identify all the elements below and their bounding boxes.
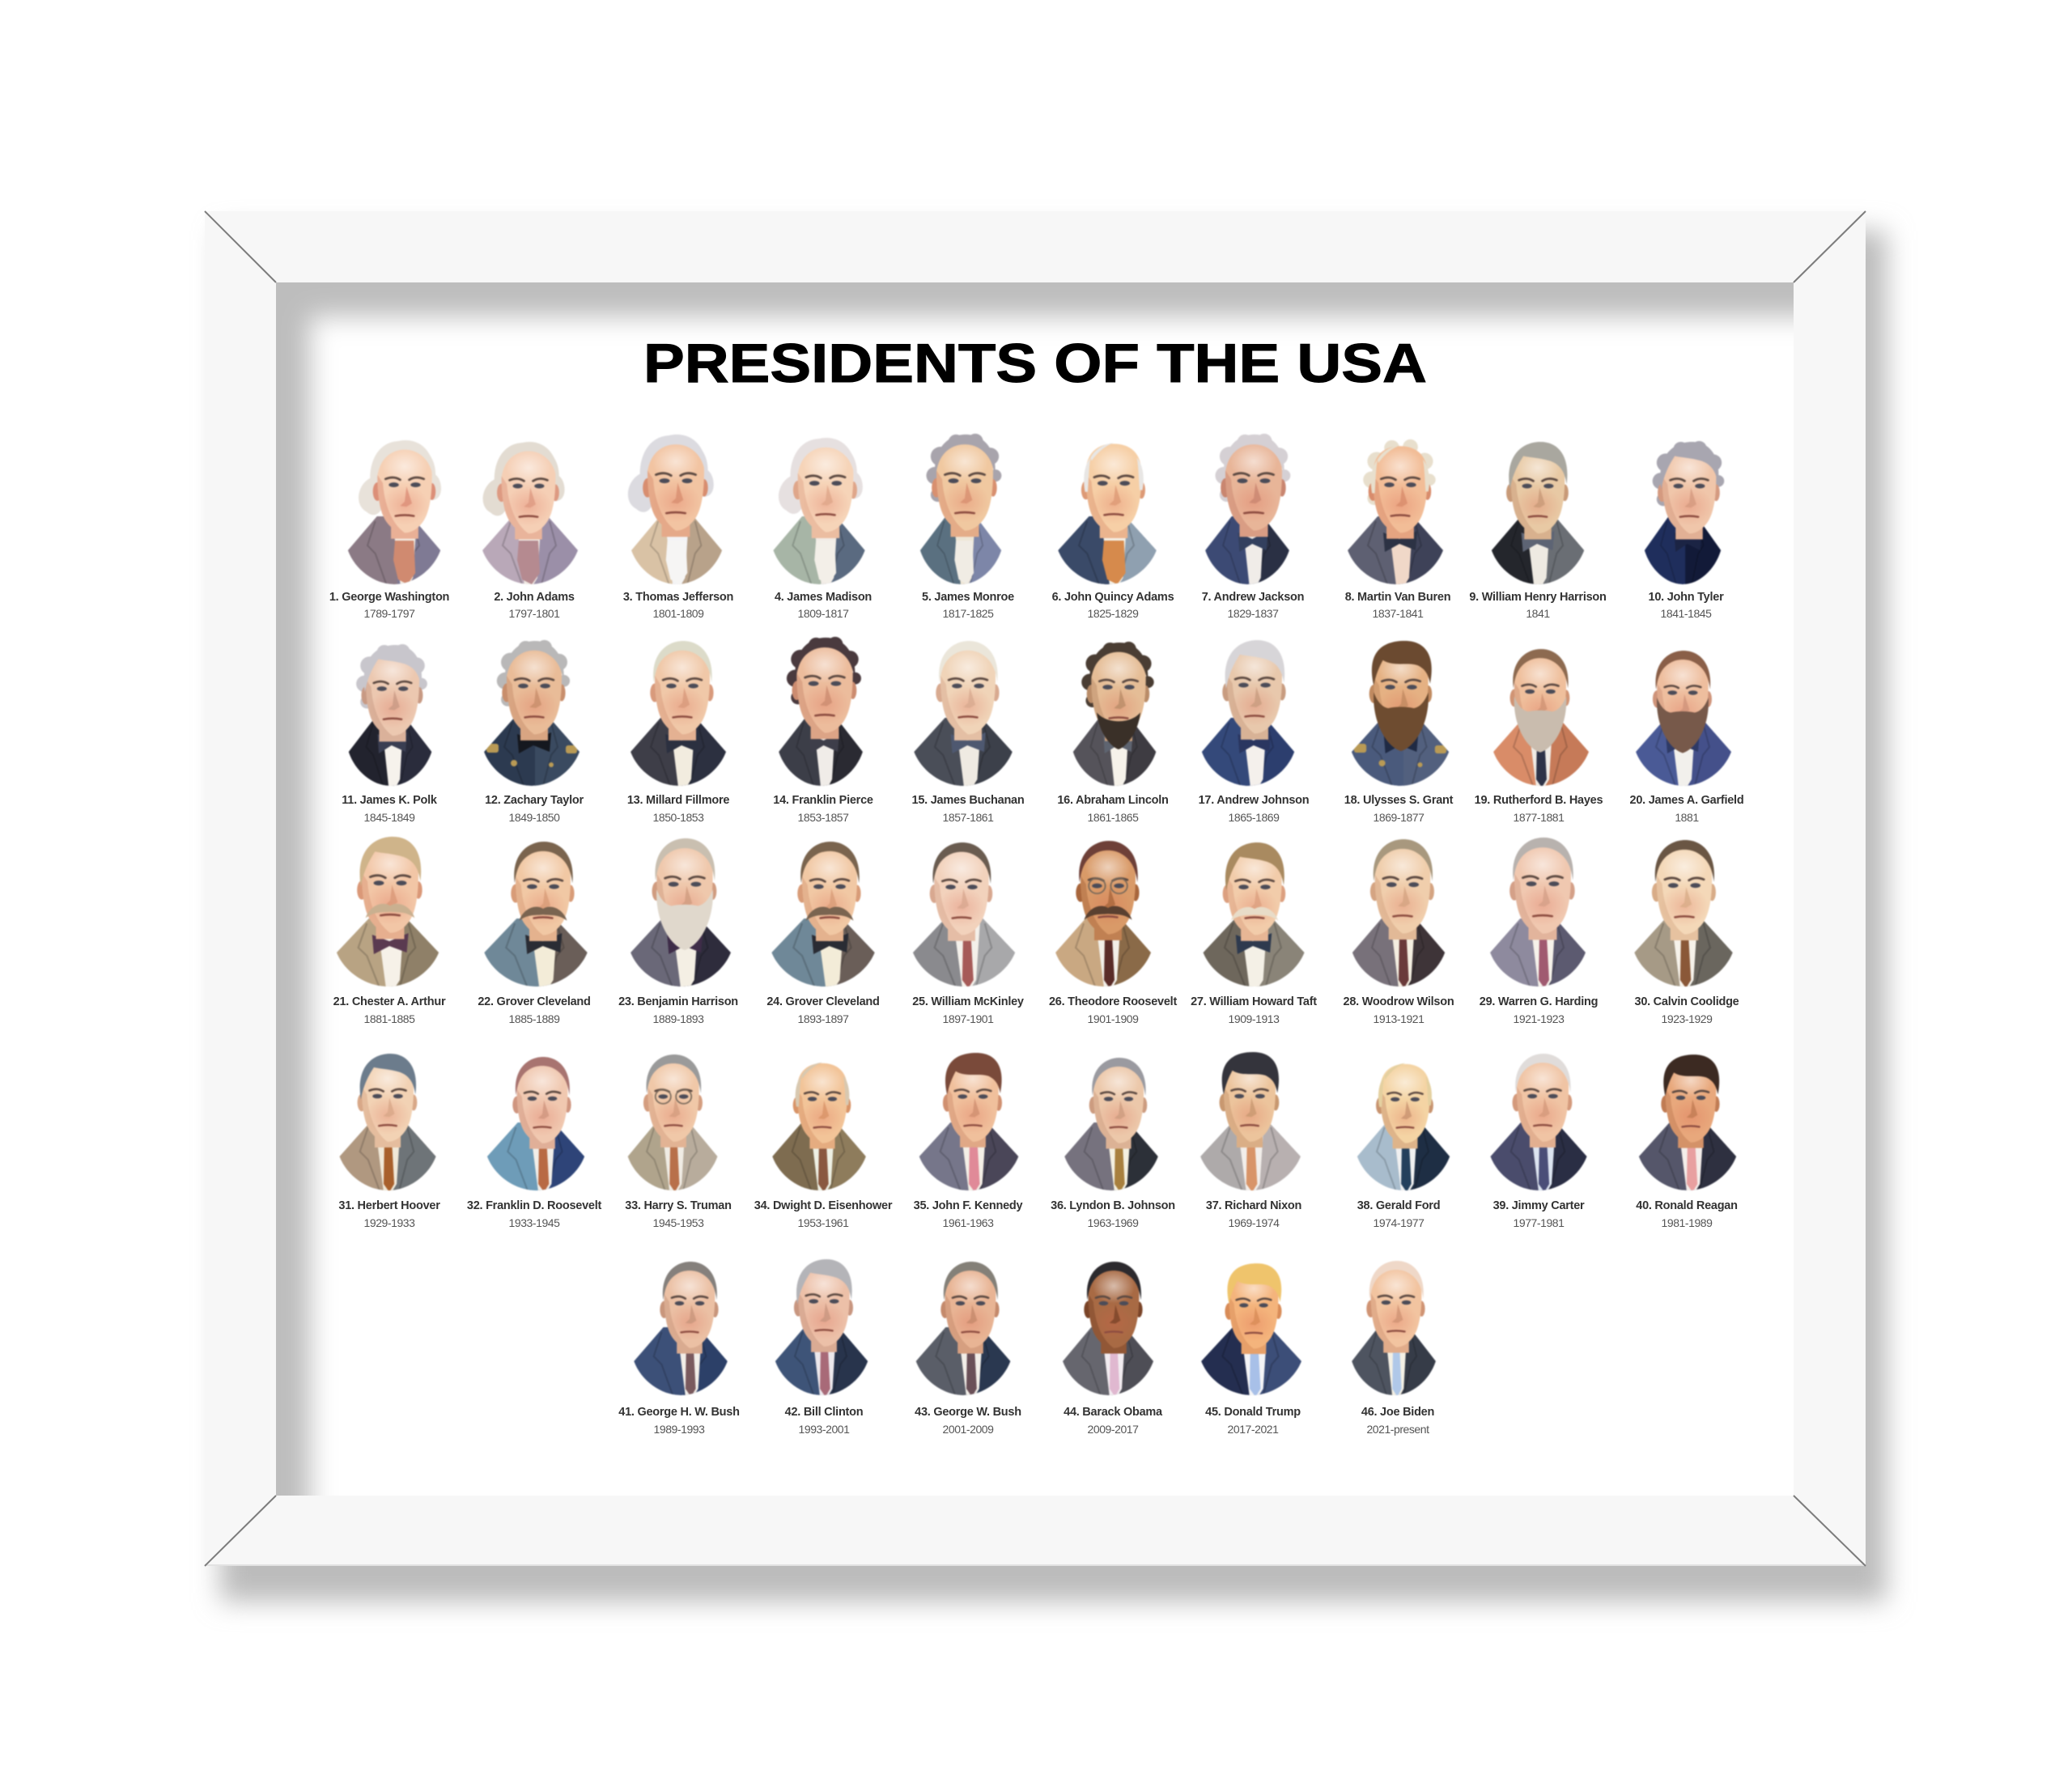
name: 24. Grover Cleveland	[766, 995, 880, 1008]
title: PRESIDENTS OF THE USA	[643, 333, 1427, 394]
name: 14. Franklin Pierce	[773, 794, 873, 807]
term: 1893-1897	[798, 1012, 849, 1025]
name: 34. Dwight D. Eisenhower	[754, 1199, 893, 1212]
portrait: Gerald Ford	[1357, 1063, 1450, 1192]
president 28	[1344, 839, 1454, 1025]
term: 1877-1881	[1514, 811, 1565, 824]
president 6	[1052, 443, 1174, 620]
portrait: John F. Kennedy	[919, 1053, 1018, 1192]
term: 1977-1981	[1514, 1216, 1565, 1229]
portrait: George H. W. Bush	[634, 1262, 728, 1397]
president 42	[775, 1259, 868, 1436]
name: 4. James Madison	[775, 591, 872, 604]
term: 2009-2017	[1088, 1423, 1139, 1436]
president 38	[1357, 1063, 1450, 1229]
portrait: Andrew Johnson	[1202, 640, 1294, 787]
name: 9. William Henry Harrison	[1469, 591, 1607, 604]
president 24	[766, 842, 880, 1025]
portrait: James Monroe	[920, 434, 1001, 586]
term: 1845-1849	[364, 811, 415, 824]
term: 1923-1929	[1662, 1012, 1713, 1025]
term: 1921-1923	[1514, 1012, 1565, 1025]
portrait: John Tyler	[1645, 441, 1724, 584]
name: 40. Ronald Reagan	[1636, 1199, 1738, 1212]
portrait: Chester A. Arthur	[337, 837, 439, 988]
portrait: Martin Van Buren	[1348, 439, 1443, 586]
name: 16. Abraham Lincoln	[1057, 794, 1169, 807]
term: 1974-1977	[1374, 1216, 1424, 1229]
name: 32. Franklin D. Roosevelt	[467, 1199, 602, 1212]
name: 42. Bill Clinton	[785, 1406, 863, 1419]
term: 2001-2009	[943, 1423, 994, 1436]
president 26	[1049, 841, 1177, 1025]
president 4	[773, 438, 872, 620]
name: 46. Joe Biden	[1361, 1406, 1434, 1419]
term: 2021-present	[1366, 1423, 1429, 1436]
term: 1869-1877	[1374, 811, 1424, 824]
president 34	[754, 1063, 893, 1229]
portrait: Dwight D. Eisenhower	[772, 1063, 866, 1192]
frame drop shadow	[220, 231, 1887, 1602]
president 13	[627, 641, 729, 824]
portrait: George W. Bush	[916, 1262, 1010, 1397]
portrait: John Adams	[482, 442, 578, 586]
portrait: Millard Fillmore	[631, 641, 726, 787]
portrait: James A. Garfield	[1636, 651, 1731, 787]
portrait: Benjamin Harrison	[631, 838, 731, 988]
name: 18. Ulysses S. Grant	[1344, 794, 1454, 807]
name: 20. James A. Garfield	[1630, 794, 1743, 807]
name: 19. Rutherford B. Hayes	[1475, 794, 1603, 807]
president 27	[1191, 842, 1317, 1025]
term: 1885-1889	[509, 1012, 560, 1025]
name: 3. Thomas Jefferson	[623, 591, 733, 604]
president 35	[914, 1053, 1023, 1229]
president 11	[342, 644, 438, 824]
term: 1961-1963	[943, 1216, 994, 1229]
term: 1929-1933	[364, 1216, 415, 1229]
president 14	[773, 637, 873, 824]
portrait: Franklin D. Roosevelt	[487, 1057, 584, 1192]
name: 8. Martin Van Buren	[1345, 591, 1450, 604]
name: 39. Jimmy Carter	[1493, 1199, 1585, 1212]
term: 1909-1913	[1229, 1012, 1280, 1025]
name: 26. Theodore Roosevelt	[1049, 995, 1177, 1008]
portrait: Calvin Coolidge	[1634, 840, 1733, 988]
name: 38. Gerald Ford	[1357, 1199, 1440, 1212]
president 45	[1201, 1263, 1301, 1436]
term: 1829-1837	[1228, 607, 1279, 620]
name: 30. Calvin Coolidge	[1635, 995, 1739, 1008]
term: 2017-2021	[1228, 1423, 1279, 1436]
name: 2. John Adams	[494, 591, 575, 604]
term: 1861-1865	[1088, 811, 1139, 824]
portrait: Richard Nixon	[1200, 1052, 1301, 1192]
portrait: John Quincy Adams	[1058, 443, 1157, 586]
term: 1993-2001	[799, 1423, 850, 1436]
portrait: James Buchanan	[914, 641, 1013, 787]
portrait: Ulysses S. Grant	[1352, 641, 1449, 786]
term: 1945-1953	[653, 1216, 704, 1229]
president 21	[333, 837, 446, 1025]
name: 28. Woodrow Wilson	[1344, 995, 1454, 1008]
term: 1889-1893	[653, 1012, 704, 1025]
president 39	[1490, 1054, 1587, 1229]
name: 5. James Monroe	[922, 591, 1014, 604]
president 10	[1645, 441, 1724, 620]
name: 31. Herbert Hoover	[338, 1199, 440, 1212]
name: 25. William McKinley	[912, 995, 1024, 1008]
president 15	[912, 641, 1024, 824]
picture frame	[205, 211, 1888, 1595]
president 22	[478, 842, 591, 1025]
name: 45. Donald Trump	[1205, 1406, 1301, 1419]
term: 1849-1850	[509, 811, 560, 824]
president 36	[1051, 1058, 1175, 1229]
name: 7. Andrew Jackson	[1202, 591, 1304, 604]
president 40	[1636, 1054, 1738, 1229]
portrait: Thomas Jefferson	[628, 435, 722, 586]
name: 41. George H. W. Bush	[618, 1406, 740, 1419]
president 2	[482, 442, 578, 620]
portrait: Warren G. Harding	[1490, 838, 1586, 988]
president 18	[1344, 641, 1454, 824]
portrait: Donald Trump	[1201, 1263, 1301, 1397]
name: 27. William Howard Taft	[1191, 995, 1317, 1008]
term: 1853-1857	[798, 811, 849, 824]
term: 1969-1974	[1229, 1216, 1280, 1229]
term: 1865-1869	[1229, 811, 1280, 824]
portrait: Bill Clinton	[775, 1259, 868, 1397]
name: 22. Grover Cleveland	[478, 995, 591, 1008]
president 1	[329, 440, 449, 620]
president 12	[484, 640, 584, 824]
term: 1857-1861	[943, 811, 994, 824]
president 23	[618, 838, 738, 1025]
portrait: James K. Polk	[349, 644, 431, 787]
portrait: Rutherford B. Hayes	[1493, 649, 1589, 787]
president 19	[1475, 649, 1603, 824]
term: 1797-1801	[509, 607, 560, 620]
portrait: William Henry Harrison	[1492, 442, 1584, 586]
term: 1837-1841	[1373, 607, 1424, 620]
president 7	[1202, 434, 1304, 620]
term: 1901-1909	[1088, 1012, 1139, 1025]
president 32	[467, 1057, 602, 1229]
portrait: George Washington	[348, 440, 441, 586]
term: 1825-1829	[1088, 607, 1139, 620]
term: 1881-1885	[364, 1012, 415, 1025]
term: 1841	[1526, 607, 1550, 620]
term: 1809-1817	[798, 607, 849, 620]
president 9	[1469, 442, 1607, 620]
term: 1933-1945	[509, 1216, 560, 1229]
term: 1913-1921	[1374, 1012, 1424, 1025]
portrait: James Madison	[773, 438, 865, 586]
term: 1841-1845	[1661, 607, 1712, 620]
portrait: Harry S. Truman	[628, 1054, 717, 1192]
president 46	[1352, 1261, 1436, 1436]
name: 10. John Tyler	[1649, 591, 1724, 604]
term: 1963-1969	[1088, 1216, 1139, 1229]
portrait: William Howard Taft	[1203, 842, 1305, 988]
name: 13. Millard Fillmore	[627, 794, 729, 807]
portrait: Grover Cleveland	[771, 842, 875, 988]
portrait: Zachary Taylor	[484, 640, 580, 786]
term: 1897-1901	[943, 1012, 994, 1025]
president 37	[1200, 1052, 1301, 1229]
name: 33. Harry S. Truman	[625, 1199, 732, 1212]
portrait: Lyndon B. Johnson	[1064, 1058, 1158, 1192]
term: 1817-1825	[943, 607, 994, 620]
portrait: Theodore Roosevelt	[1055, 841, 1151, 988]
name: 36. Lyndon B. Johnson	[1051, 1199, 1175, 1212]
president 25	[912, 842, 1024, 1025]
president 17	[1199, 640, 1309, 824]
portrait: Barack Obama	[1063, 1262, 1153, 1397]
name: 35. John F. Kennedy	[914, 1199, 1023, 1212]
term: 1850-1853	[653, 811, 704, 824]
president 16	[1057, 642, 1169, 824]
term: 1789-1797	[364, 607, 415, 620]
term: 1981-1989	[1662, 1216, 1713, 1229]
name: 29. Warren G. Harding	[1480, 995, 1598, 1008]
portrait: Andrew Jackson	[1205, 434, 1290, 586]
president 30	[1634, 840, 1739, 1025]
president 20	[1630, 651, 1743, 824]
name: 37. Richard Nixon	[1206, 1199, 1301, 1212]
term: 1989-1993	[654, 1423, 705, 1436]
name: 21. Chester A. Arthur	[333, 995, 446, 1008]
term: 1953-1961	[798, 1216, 849, 1229]
term: 1881	[1675, 811, 1699, 824]
portrait: Herbert Hoover	[339, 1054, 436, 1192]
name: 17. Andrew Johnson	[1199, 794, 1309, 807]
portrait: Jimmy Carter	[1490, 1054, 1587, 1192]
name: 12. Zachary Taylor	[485, 794, 584, 807]
name: 11. James K. Polk	[342, 794, 438, 807]
portrait: William McKinley	[913, 842, 1015, 988]
portrait: Joe Biden	[1352, 1261, 1436, 1397]
name: 43. George W. Bush	[915, 1406, 1021, 1419]
president 29	[1480, 838, 1598, 1025]
president 44	[1063, 1262, 1163, 1436]
president 33	[625, 1054, 732, 1229]
portrait: Franklin Pierce	[779, 637, 863, 787]
name: 44. Barack Obama	[1064, 1406, 1163, 1419]
president 41	[618, 1262, 740, 1436]
portrait: Abraham Lincoln	[1073, 642, 1156, 787]
president 3	[623, 435, 733, 620]
president 5	[920, 434, 1014, 620]
name: 6. John Quincy Adams	[1052, 591, 1174, 604]
term: 1801-1809	[653, 607, 704, 620]
name: 23. Benjamin Harrison	[618, 995, 738, 1008]
portrait: Grover Cleveland	[484, 842, 588, 988]
portrait: Ronald Reagan	[1639, 1054, 1736, 1192]
name: 1. George Washington	[329, 591, 449, 604]
name: 15. James Buchanan	[912, 794, 1024, 807]
president 8	[1345, 439, 1450, 620]
president 43	[915, 1262, 1021, 1436]
president 31	[338, 1054, 440, 1229]
portrait: Woodrow Wilson	[1352, 839, 1445, 988]
